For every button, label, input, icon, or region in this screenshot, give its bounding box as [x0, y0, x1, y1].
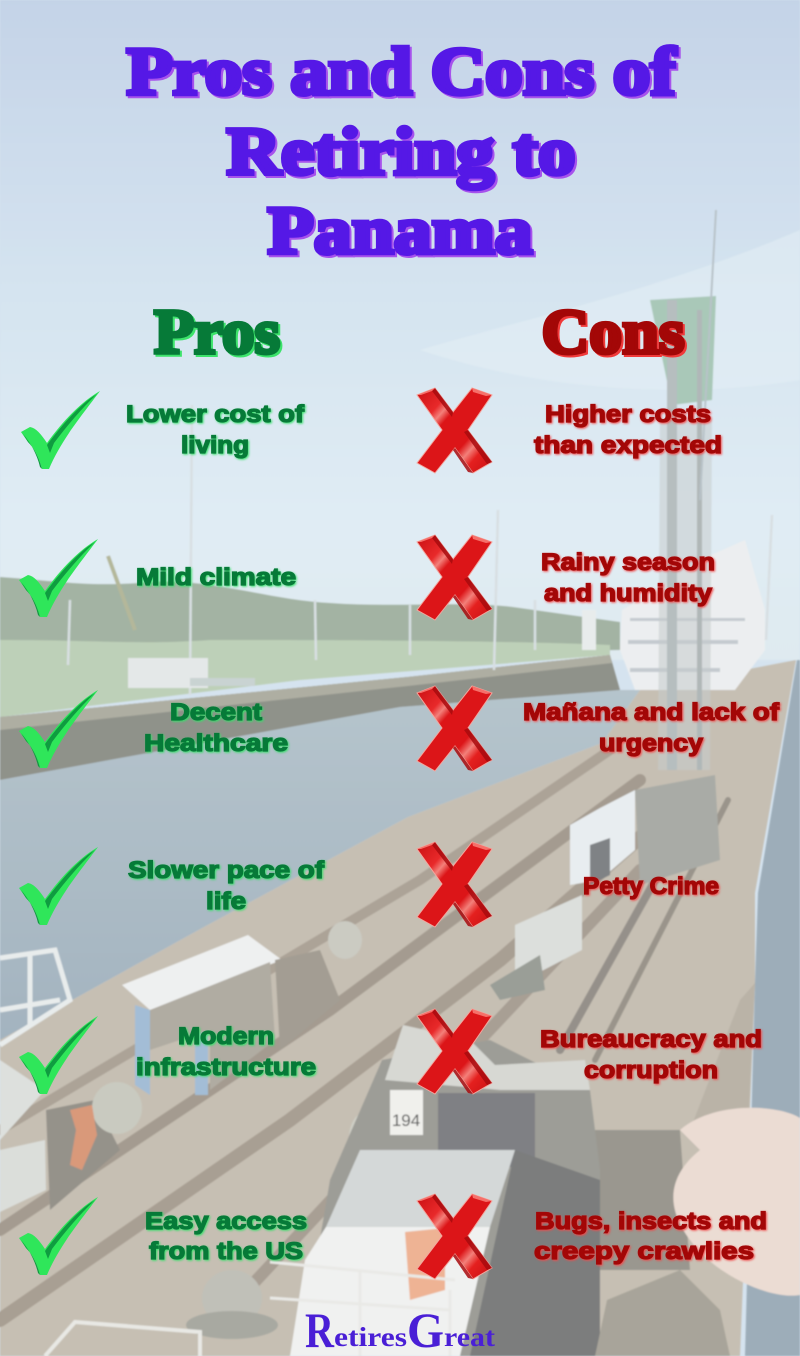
cruise ship — [620, 540, 765, 690]
con 5: bureaucracy: Bureaucracy and — [540, 1026, 762, 1053]
pro 4: slower pace of life: life — [206, 888, 246, 915]
pro 1: lower cost of living: Lower cost of — [126, 401, 305, 428]
dock surface — [0, 660, 796, 1356]
logo: RetiresGreat: etires — [334, 1322, 407, 1352]
pro 4: slower pace of life — [19, 847, 325, 925]
con 3: manana — [417, 686, 780, 771]
pro 5: modern infrastructure: Modern — [178, 1023, 274, 1050]
pro 6: easy access from the US: Easy access — [145, 1208, 307, 1235]
con 6: bugs — [417, 1194, 767, 1279]
con 6: bugs: creepy crawlies — [534, 1238, 754, 1265]
con 2: rainy season — [417, 535, 715, 620]
title: Pros and Cons of — [128, 35, 679, 111]
con 4: petty crime: Petty Crime — [583, 873, 719, 900]
pro 2: mild climate: Mild climate — [136, 564, 296, 591]
pro 6: easy access from the US: from the US — [149, 1238, 303, 1265]
rock — [595, 1270, 730, 1356]
background photo: Panama Canal locks, faded: 194 — [392, 1111, 420, 1130]
heading: Pros: Pros — [156, 298, 282, 369]
canal water — [0, 690, 640, 1040]
far water on right — [745, 660, 800, 1356]
hand foreground — [673, 1108, 800, 1296]
trackside hut and loco far — [570, 790, 635, 885]
title: Panama — [270, 194, 534, 270]
pro 5: modern infrastructure: infrastructure — [136, 1054, 316, 1081]
hills — [0, 577, 620, 660]
sky — [0, 0, 800, 660]
title — [126, 33, 679, 270]
con 2: rainy season: and humidity — [544, 580, 713, 607]
pro 6: easy access from the US — [19, 1197, 307, 1275]
guard rail top left — [0, 950, 70, 1045]
title: Retiring to — [228, 115, 578, 191]
locomotive 194 — [300, 1040, 600, 1356]
heading: Cons: Cons — [542, 296, 684, 367]
mast — [650, 296, 716, 405]
pro 4: slower pace of life: Slower pace of — [128, 857, 325, 884]
con 6: bugs: Bugs, insects and — [535, 1208, 767, 1235]
lamp posts — [68, 405, 772, 695]
bollard bottom — [202, 1270, 262, 1326]
pro 3: decent healthcare: Decent — [170, 699, 262, 726]
con 3: manana: Mañana and lack of — [523, 699, 780, 726]
cons column — [417, 388, 780, 1279]
con 3: manana: urgency — [599, 730, 704, 757]
con 1: higher costs — [417, 388, 722, 473]
logo: RetiresGreat: reat — [444, 1322, 495, 1352]
bollard mid — [328, 921, 362, 959]
pro 5: modern infrastructure — [19, 1016, 316, 1094]
pro 3: decent healthcare: Healthcare — [144, 730, 288, 757]
con 1: higher costs: than expected — [534, 432, 722, 459]
pro 1: lower cost of living — [21, 391, 305, 469]
con 4: petty crime — [417, 842, 719, 927]
title: Pros and Cons of — [126, 33, 677, 109]
con 2: rainy season: Rainy season — [541, 549, 715, 576]
con 1: higher costs: Higher costs — [545, 401, 711, 428]
field — [0, 640, 610, 717]
title: Retiring to — [226, 113, 576, 189]
pro 3: decent healthcare — [19, 690, 288, 768]
pro 1: lower cost of living: living — [181, 432, 249, 459]
rail tracks — [0, 750, 728, 1330]
con 5: bureaucracy: corruption — [584, 1057, 718, 1084]
pros column — [19, 391, 325, 1275]
far shore building — [128, 658, 208, 688]
title: Panama — [268, 192, 532, 268]
kiosk on dock — [122, 935, 282, 1010]
heading: Cons: Cons — [544, 298, 686, 369]
lock wall — [0, 655, 620, 780]
con 5: bureaucracy — [417, 1009, 762, 1094]
heading: Pros: Pros — [154, 296, 280, 367]
pro 2: mild climate — [19, 539, 296, 617]
logo: RetiresGreat — [305, 1302, 495, 1356]
